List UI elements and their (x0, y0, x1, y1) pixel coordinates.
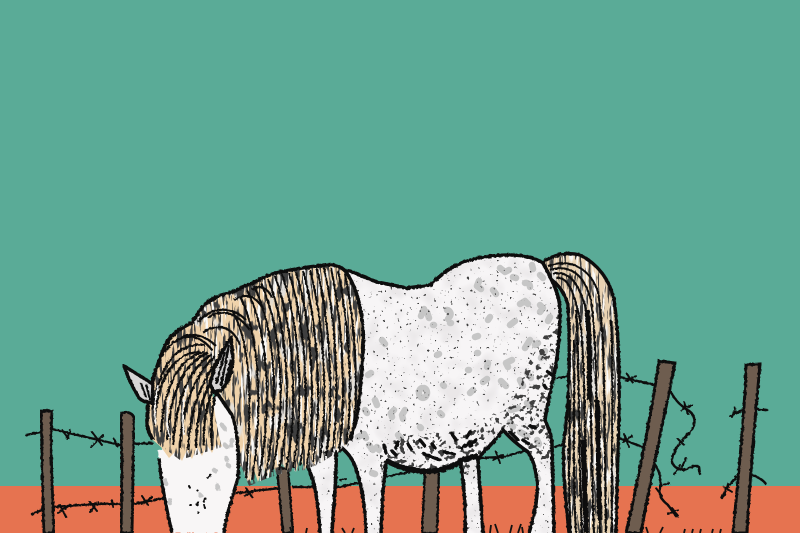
mane strands (232, 268, 356, 480)
barbed wire (26, 374, 767, 517)
forelock outline (147, 323, 192, 440)
grass tufts (290, 524, 721, 533)
horse tail (540, 250, 625, 533)
left ear (124, 366, 153, 403)
fence post 4 (422, 470, 439, 533)
forelock white highlights (155, 385, 188, 438)
horse face (158, 393, 238, 533)
fence post 3 (277, 468, 293, 533)
fence post 6 (733, 364, 760, 533)
fence post 1 (41, 411, 54, 533)
forelock strands (152, 335, 218, 450)
horse body and legs (300, 250, 565, 533)
face specks (189, 475, 211, 513)
face flecks (165, 425, 232, 503)
face outline (159, 393, 238, 533)
mane (190, 262, 366, 486)
right ear (210, 338, 233, 392)
mane outline (192, 265, 363, 440)
fence post 2 (121, 412, 134, 533)
forelock (145, 320, 225, 465)
grey coat spots (358, 265, 550, 479)
crown curls (198, 287, 272, 345)
orange ground (0, 486, 800, 533)
illustration: horse grazing at a barbed wire fence (0, 251, 800, 533)
fence post 5 (626, 361, 675, 533)
